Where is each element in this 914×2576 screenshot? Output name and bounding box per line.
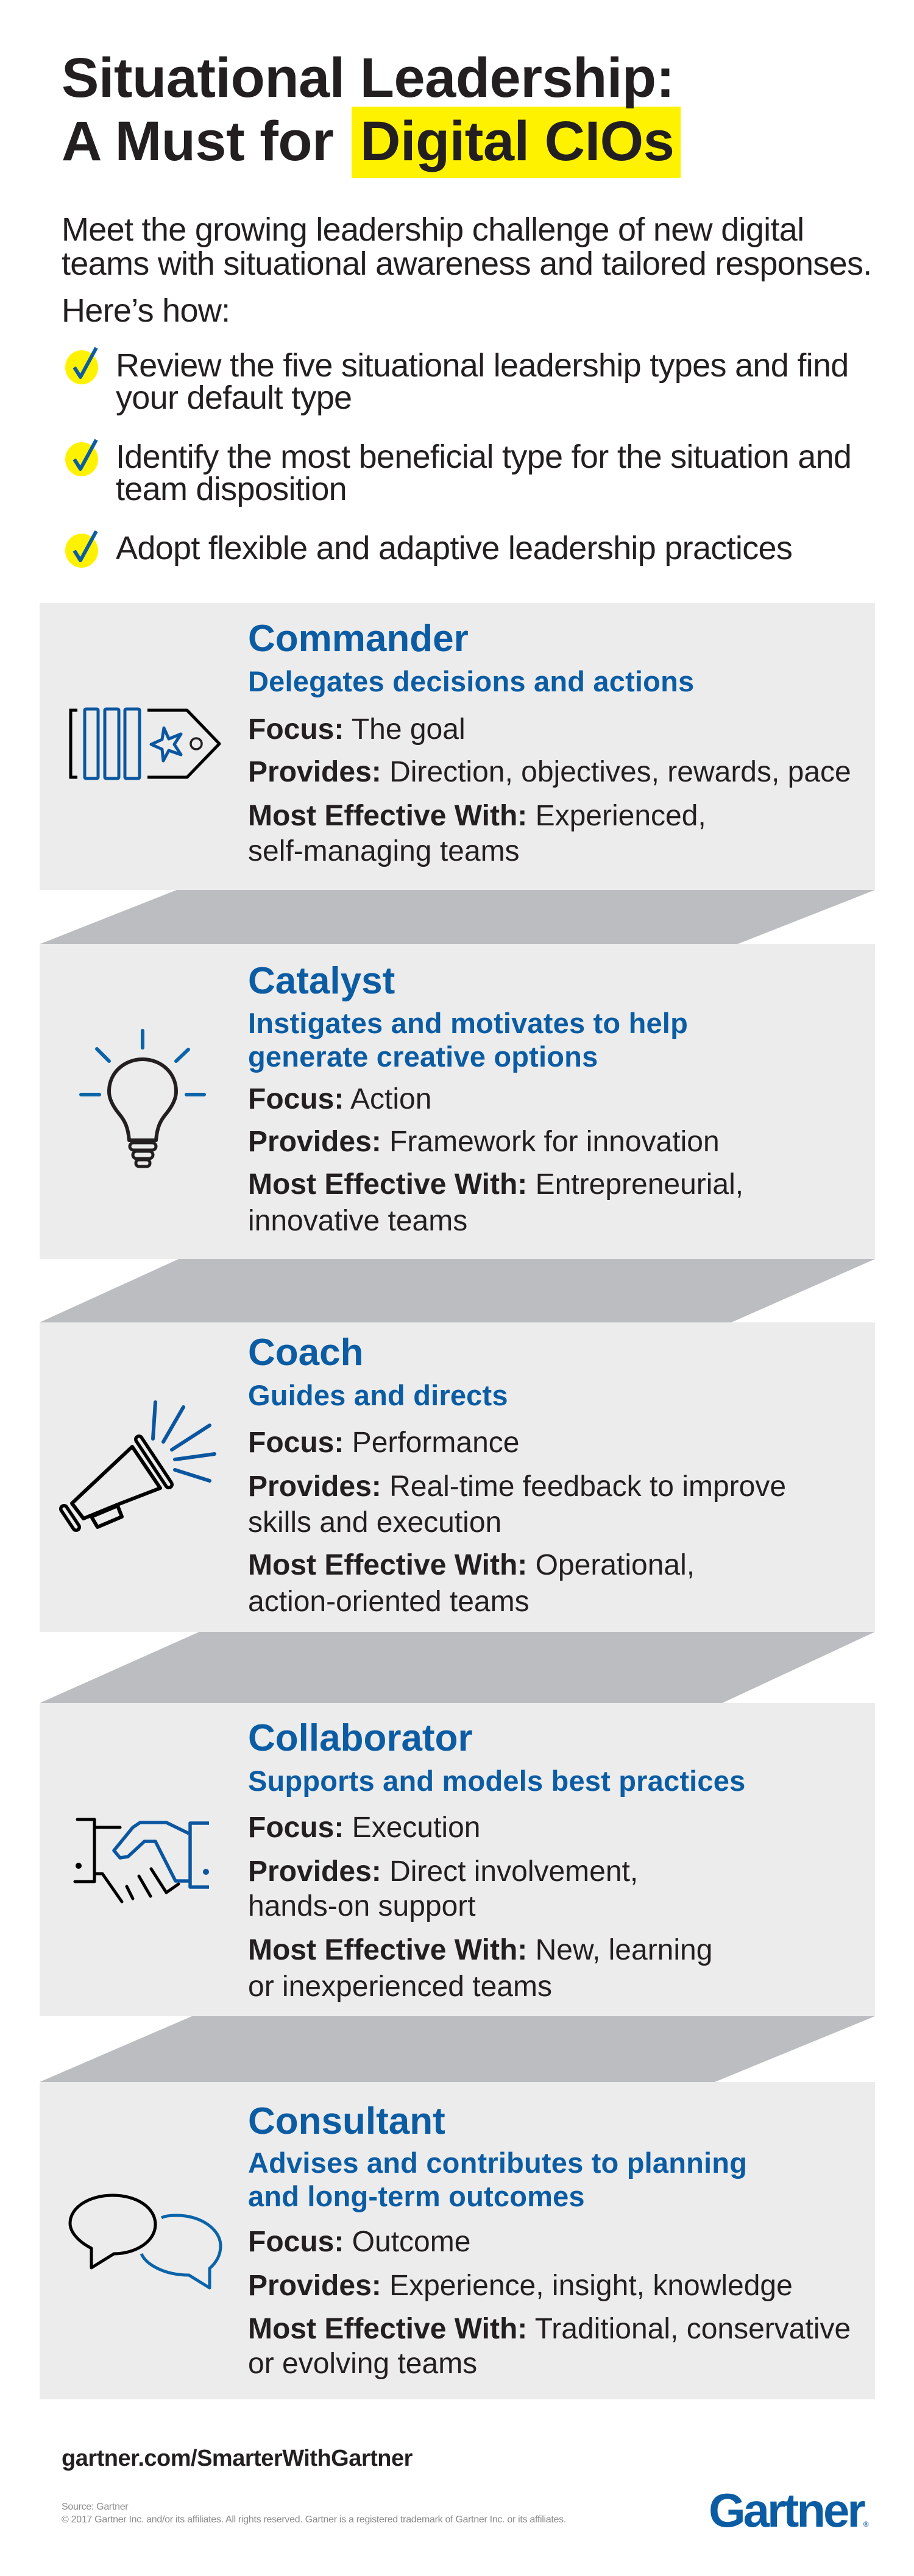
catalyst text: generate creative options [248,1040,598,1073]
collaborator text: hands-on support [248,1890,476,1922]
intro text: Here’s how: [62,292,230,329]
logo: Gartner: Gartner® [709,2483,869,2537]
collaborator text: Most Effective With: New, learning [248,1934,712,1966]
icon: check 1 [65,347,98,384]
commander text: Delegates decisions and actions [248,665,694,697]
checklist: Review the five situational leadership types and find [116,347,849,384]
consultant text: Consultant [248,2100,445,2142]
panel: consultant [40,2082,875,2399]
consultant text [248,2100,851,2380]
commander text: Commander [248,618,469,660]
title highlight [352,107,681,178]
commander text: Focus: The goal [248,713,466,746]
icon: handshake [73,1818,209,1903]
icon: speech bubbles [68,2194,222,2289]
footer url: gartner.com/SmarterWithGartner [62,2446,413,2471]
coach text [248,1332,786,1618]
coach text: Focus: Performance [248,1427,519,1459]
checklist: team disposition [116,471,347,507]
consultant text: and long-term outcomes [248,2180,585,2212]
intro text: Meet the growing leadership challenge of new digital [62,211,804,248]
intro text: teams with situational awareness and tailored responses. [62,245,872,282]
commander text: self-managing teams [248,835,520,867]
collaborator text: Collaborator [248,1717,473,1759]
consultant text: Provides: Experience, insight, knowledge [248,2270,793,2302]
catalyst text: Instigates and motivates to help [248,1007,688,1039]
collaborator text [248,1717,745,2003]
checklist: Adopt flexible and adaptive leadership practices [116,530,792,566]
consultant text: Most Effective With: Traditional, conservative [248,2313,851,2345]
checklist [65,347,851,568]
catalyst text: Provides: Framework for innovation [248,1126,720,1158]
panel: collaborator [40,1703,875,2016]
collaborator text: Provides: Direct involvement, [248,1855,638,1888]
catalyst text: Catalyst [248,960,395,1002]
icon: megaphone [59,1400,216,1532]
coach text: Provides: Real-time feedback to improve [248,1470,786,1503]
coach text: action-oriented teams [248,1586,530,1618]
consultant text: Focus: Outcome [248,2226,470,2258]
collaborator text: Focus: Execution [248,1812,480,1844]
coach text: Most Effective With: Operational, [248,1549,695,1581]
consultant text: or evolving teams [248,2348,477,2380]
catalyst text: Focus: Action [248,1083,431,1115]
catalyst text: innovative teams [248,1205,467,1237]
commander text: Most Effective With: Experienced, [248,800,706,832]
collaborator text: or inexperienced teams [248,1971,552,2003]
panel: catalyst [40,944,875,1259]
collaborator text: Supports and models best practices [248,1765,745,1797]
title: Situational Leadership: [62,47,675,109]
source and copyright [62,2502,566,2525]
icon: check 3 [65,530,98,568]
title: A Must for [62,110,333,172]
icon: check 2 [65,439,98,476]
icon: commander tag [69,708,221,780]
panel: commander [40,603,875,890]
coach text: skills and execution [248,1506,501,1539]
source and copyright: © 2017 Gartner Inc. and/or its affiliates. All rights reserved. Gartner is a registered trademark of Gartner Inc. or its affiliates. [62,2514,566,2525]
coach text: Guides and directs [248,1379,508,1411]
icon: light bulb [79,1029,206,1168]
source and copyright: Source: Gartner [62,2502,128,2512]
title [62,47,681,178]
catalyst text [248,960,743,1237]
consultant text: Advises and contributes to planning [248,2147,747,2179]
intro text [62,211,872,329]
checklist: your default type [116,379,352,416]
commander text [248,618,851,867]
commander text: Provides: Direction, objectives, rewards, pace [248,756,851,788]
panel: coach [40,1322,875,1632]
coach text: Coach [248,1332,363,1374]
title: Digital CIOs [360,110,674,172]
catalyst text: Most Effective With: Entrepreneurial, [248,1168,743,1201]
checklist: Identify the most beneficial type for the situation and [116,439,851,475]
